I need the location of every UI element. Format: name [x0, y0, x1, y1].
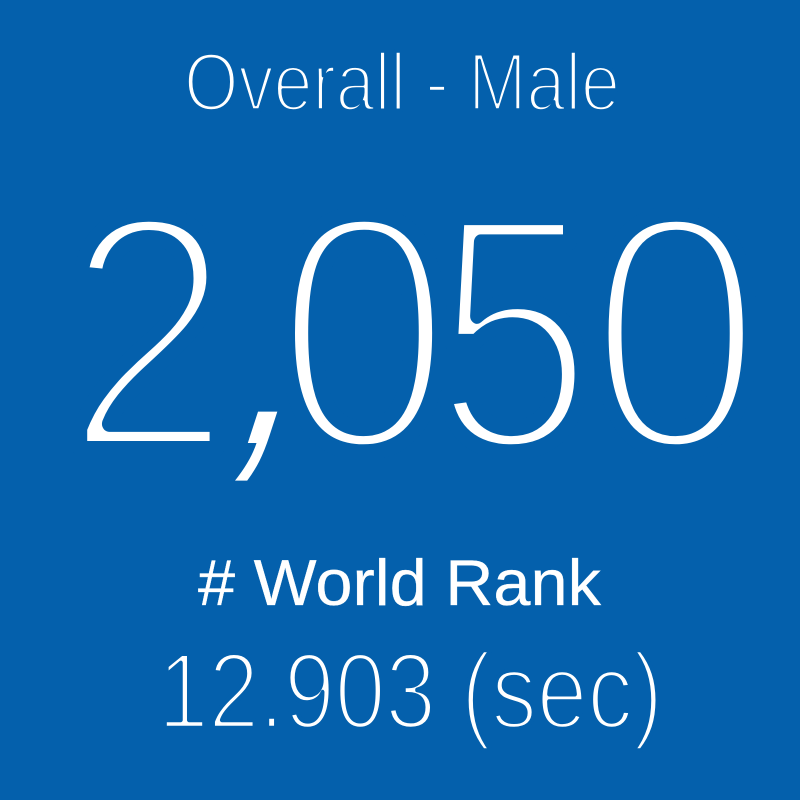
main number: 2,050: [65, 144, 762, 521]
main number: 2,050: 0: [275, 145, 452, 521]
main number: 2,050: 0: [589, 144, 762, 521]
main number: 2,050: 2: [65, 144, 232, 521]
title: Overall - Male: Overall - Male: [184, 37, 620, 128]
value: 12.903 (sec): 12.903 (sec): [158, 630, 663, 751]
main number: 2,050: ,: [209, 178, 372, 506]
label: # World Rank: # World Rank: [198, 546, 602, 619]
main number: 2,050: 5: [434, 145, 593, 521]
